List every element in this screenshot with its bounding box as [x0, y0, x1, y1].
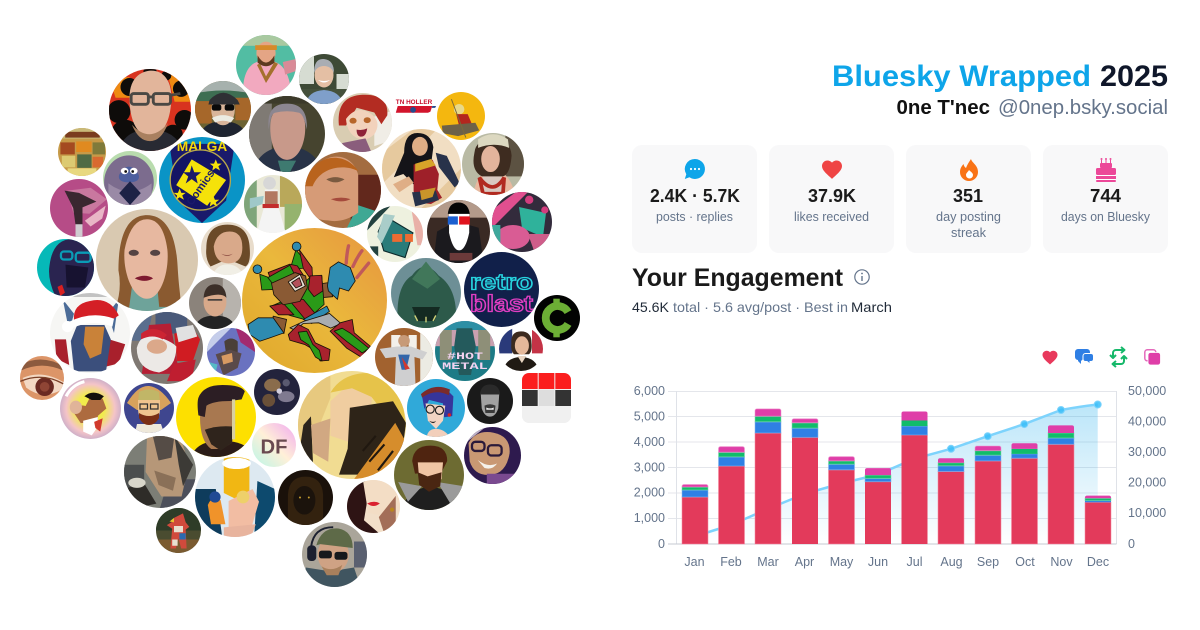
stat card: day posting streak: day posting	[936, 210, 1001, 224]
avatar: pink muscle man	[236, 35, 296, 95]
avatar: bearded cartoon man	[394, 440, 464, 510]
right axis labels: 40,000	[1128, 414, 1166, 428]
avatar: red and black grid logo	[522, 373, 571, 423]
month labels: Apr	[795, 555, 814, 569]
month labels: Sep	[977, 555, 999, 569]
avatar: red-haired anime girl	[333, 93, 392, 152]
stacked bar and line chart	[634, 384, 1166, 569]
legend: replies	[1075, 349, 1094, 364]
right axis labels	[1128, 384, 1166, 551]
stat card: day posting streak: streak	[951, 226, 987, 240]
avatar: bald man with glasses	[109, 69, 191, 151]
avatar: dark hooded figure	[278, 470, 333, 525]
avatar: man in green cap with headset	[302, 522, 367, 587]
icon: fire	[960, 159, 978, 181]
avatar: boy	[189, 277, 241, 329]
avatar: Amalgam Comics logo: MALGA	[177, 139, 227, 154]
avatar: grey-haired man	[249, 96, 325, 172]
month labels: Jan	[684, 555, 705, 569]
legend: reposts	[1110, 347, 1127, 367]
left axis labels: 6,000	[634, 384, 665, 398]
engagement summary: 45.6K	[632, 299, 670, 315]
stat card: days on Bluesky: 744	[1090, 185, 1122, 206]
avatar: man in graphic t-shirt	[375, 328, 433, 386]
avatar: person in colourful suit	[156, 508, 200, 552]
icon: birthday cake	[1096, 158, 1116, 182]
avatar: comic heroes with wings	[195, 457, 275, 537]
right axis labels: 10,000	[1128, 506, 1166, 520]
engagement summary: total · 5.6 avg/post · Best in	[673, 299, 848, 315]
avatar: blue-haired cartoon woman	[407, 379, 465, 437]
avatar: woman with red lips	[347, 480, 400, 533]
monthly bars	[682, 409, 1111, 544]
avatar: Vader with glasses	[37, 239, 94, 296]
stat card: days on Bluesky	[1043, 145, 1168, 253]
month labels: Jun	[868, 555, 888, 569]
icon: chat bubble	[685, 159, 705, 179]
month labels: Nov	[1050, 555, 1073, 569]
left axis labels: 5,000	[634, 410, 665, 424]
stat card: likes received: likes received	[794, 210, 869, 224]
month labels: May	[830, 555, 854, 569]
engagement summary: March	[851, 299, 892, 315]
stat card: day posting streak: 351	[953, 185, 983, 206]
user name and handle: 0ne T'nec	[896, 97, 990, 119]
avatar: comic figure on pink background	[50, 179, 108, 237]
icon: info	[855, 270, 869, 284]
right axis labels: 50,000	[1128, 384, 1166, 398]
user name and handle: @0nep.bsky.social	[998, 97, 1168, 119]
avatar: yellow cartoon figure	[437, 92, 485, 140]
cumulative area and line	[694, 401, 1101, 544]
avatar: comic collage	[58, 128, 106, 176]
avatar: dark busy comic art	[254, 369, 300, 415]
avatar: DF logo: DF	[261, 436, 287, 458]
user name and handle	[896, 97, 1168, 119]
stat card: posts and replies: 2.4K · 5.7K	[650, 185, 741, 206]
stat card: likes received: 37.9K	[808, 185, 857, 206]
avatar: horned figure in Santa hat	[50, 293, 130, 373]
left axis labels	[634, 384, 665, 551]
avatar: green C coin logo	[534, 295, 580, 341]
avatar: blonde comic man	[298, 371, 406, 479]
stat card: posts and replies	[632, 145, 757, 253]
avatar: Wonder Woman comic	[382, 129, 461, 208]
avatar: woman in cream cap	[462, 133, 524, 195]
avatar cluster	[20, 35, 580, 587]
heading: Your Engagement: Your Engagement	[632, 264, 844, 292]
avatar: Hot Metal robot	[435, 321, 495, 381]
avatar: Amalgam Comics logo: Comics	[184, 168, 217, 208]
avatar: woman before US flag	[499, 328, 543, 371]
avatar: DF logo	[252, 423, 296, 467]
month labels	[684, 555, 1109, 569]
left axis labels: 2,000	[634, 486, 665, 500]
avatar: TN Holler logo	[396, 99, 436, 113]
avatar: smiling man in blue shirt	[299, 54, 349, 104]
month labels: Feb	[720, 555, 742, 569]
avatar: bearded man on yellow	[176, 377, 256, 457]
avatar: pink and teal painting	[492, 192, 552, 252]
left axis labels: 3,000	[634, 460, 665, 474]
avatar: white-robed comic hero	[244, 175, 302, 233]
stat card: likes received	[769, 145, 894, 253]
avatar: purple-tinted man with glasses	[464, 427, 521, 484]
avatar: teal comic robot	[367, 206, 423, 262]
avatar: Hot Metal robot: METAL	[442, 362, 488, 373]
right axis labels: 0	[1128, 537, 1135, 551]
avatar: cartoon man in sun hat	[124, 383, 174, 433]
avatar: Amalgam Comics logo	[159, 137, 245, 223]
avatar: grey comic man with cigarette	[124, 436, 196, 508]
month labels: Mar	[757, 555, 779, 569]
avatar: Speedy Gonzales in bubble	[60, 378, 120, 438]
avatar: man on black background	[467, 378, 513, 424]
left axis labels: 0	[658, 537, 665, 551]
left axis labels: 1,000	[634, 511, 665, 525]
avatar: woman with brown hair	[201, 222, 254, 275]
avatar: Hot Metal robot: #HOT	[447, 352, 483, 363]
stat card: days on Bluesky: days on Bluesky	[1061, 210, 1151, 224]
plot grid	[668, 391, 1116, 544]
month labels: Aug	[940, 555, 963, 569]
avatar: woman with long hair	[96, 209, 198, 311]
avatar: Retro Blast logo	[464, 252, 539, 327]
icon: heart	[822, 160, 842, 179]
avatar: Retro Blast logo: retro	[470, 269, 532, 294]
engagement summary	[632, 299, 892, 315]
month labels: Jul	[907, 555, 922, 569]
avatar: green monster	[391, 258, 461, 328]
stat card: posts and replies: posts · replies	[656, 210, 733, 224]
right axis labels: 20,000	[1128, 476, 1166, 490]
title: Bluesky Wrapped	[832, 60, 1091, 93]
avatar: close-up eye	[20, 356, 64, 400]
avatar: Thor comic	[207, 328, 255, 376]
avatar: jester turtle comic character	[242, 228, 387, 373]
month labels: Dec	[1087, 555, 1109, 569]
avatar: TN Holler logo: TN HOLLER	[396, 99, 433, 106]
avatar: figure with 3D glasses	[427, 200, 490, 263]
month labels: Oct	[1015, 555, 1035, 569]
avatar: Santa with red ranger	[131, 312, 203, 384]
avatar: abominable snowman	[103, 151, 157, 205]
stat card: day posting streak	[906, 145, 1031, 253]
legend: quotes	[1145, 350, 1160, 365]
right axis labels: 30,000	[1128, 445, 1166, 459]
legend icons	[1042, 347, 1160, 367]
avatar: man in cap and sunglasses	[195, 81, 251, 137]
title: 2025	[1100, 60, 1168, 93]
avatar: Retro Blast logo: blast	[470, 290, 533, 316]
legend: likes heart	[1042, 351, 1058, 365]
left axis labels: 4,000	[634, 435, 665, 449]
avatar: red-haired woman	[305, 152, 381, 228]
